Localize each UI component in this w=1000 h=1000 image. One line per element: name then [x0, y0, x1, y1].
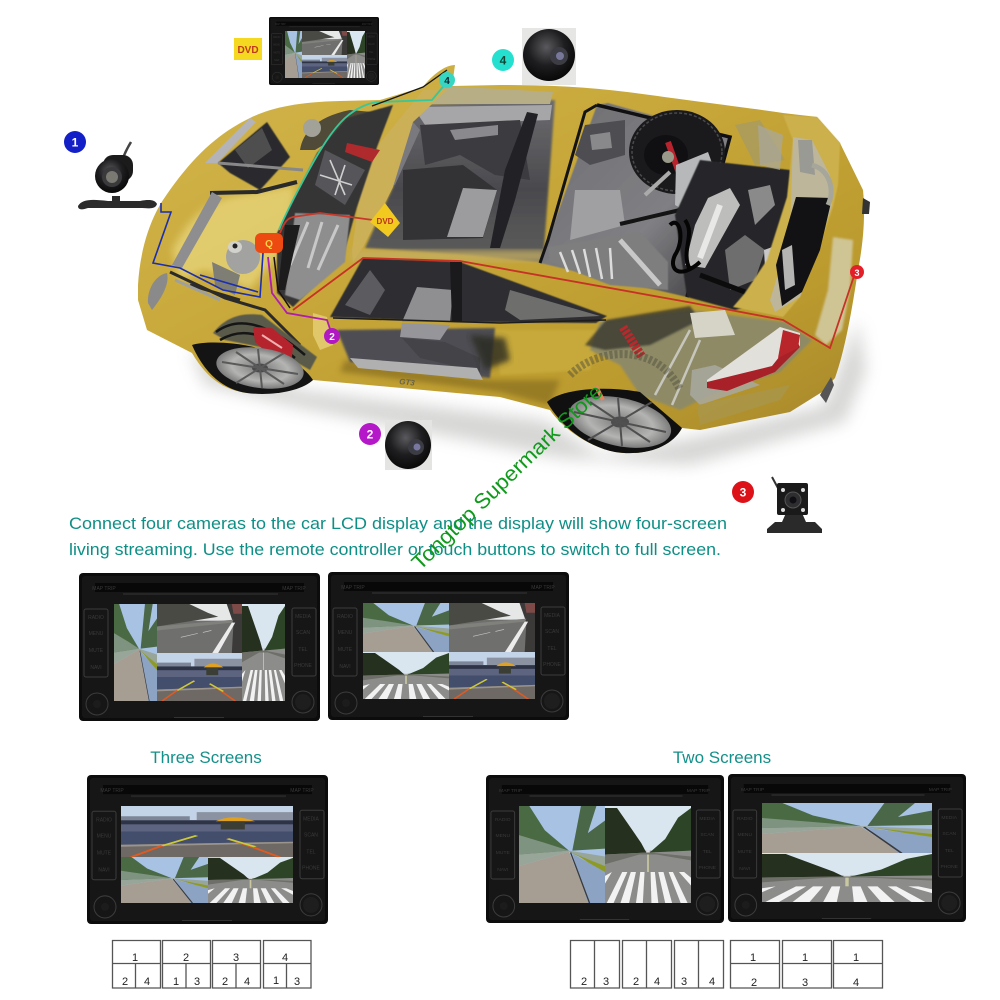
number badge 4: 4 — [500, 54, 507, 68]
rear mechanicals — [570, 306, 834, 425]
layout 2 beside 3 — [570, 940, 620, 988]
layout 3 over 2 4: 3 — [233, 952, 239, 964]
marker: 3 on car — [850, 265, 864, 279]
layout diagrams: two screens — [570, 940, 882, 989]
layout diagrams: three screens — [112, 940, 311, 988]
icon: DVD yellow label: DVD — [237, 45, 259, 56]
callout: camera 2 — [359, 420, 432, 470]
dash and door pocket strip — [413, 105, 552, 125]
marker: 4 on car: 4 — [444, 76, 450, 87]
layout 1 over 2: 1 — [750, 952, 756, 964]
layout 4 over 1 3: 3 — [294, 976, 300, 988]
heading: Three Screens: Three Screens — [150, 748, 262, 767]
car body — [138, 65, 864, 453]
steering and front pipes — [170, 272, 300, 345]
layout 1 over 3 — [782, 940, 832, 989]
layout 1 over 3: 1 — [802, 952, 808, 964]
wire: red camera 3 — [293, 258, 855, 348]
rear wheel — [547, 386, 682, 456]
icon: dome camera — [385, 420, 432, 470]
brake booster — [226, 240, 260, 274]
layout 2 beside 4: 4 — [654, 976, 660, 988]
layout 3 beside 4 — [674, 940, 724, 988]
small head unit with four-way screen — [269, 17, 379, 85]
head unit: four screens variant 2 — [328, 572, 569, 720]
top front tyre stripes — [300, 110, 372, 150]
top DVD label and display — [234, 17, 379, 85]
layout 1 over 2: 2 — [751, 977, 757, 989]
layout 1 over 2 4: 1 — [132, 952, 138, 964]
head unit: two screens horizontal split — [728, 774, 966, 922]
description text — [69, 515, 727, 559]
marker: DVD diamond — [370, 203, 400, 237]
ground shadow — [190, 320, 866, 465]
callout: camera 1 — [64, 131, 157, 209]
layout 1 over 2 4: 2 — [122, 976, 128, 988]
layout 1 over 3: 3 — [802, 977, 808, 989]
rear fender bright panel — [495, 330, 600, 375]
layout 1 over 4: 1 — [853, 952, 859, 964]
layout 1 over 2 — [730, 940, 780, 989]
layout 1 over 4 — [834, 940, 882, 989]
wire: purple camera 2 — [268, 257, 332, 335]
number badge 3: 3 — [740, 486, 747, 500]
layout 1 over 4: 4 — [853, 977, 859, 989]
icon: dome camera — [522, 28, 576, 85]
engine bay — [670, 120, 793, 310]
layout 1 over 2 4: 4 — [144, 976, 150, 988]
icon: DVD yellow label — [234, 38, 262, 60]
gold A-pillar — [352, 90, 447, 262]
icon: bracket camera — [78, 142, 157, 209]
rear window interior — [540, 103, 730, 297]
icon: square LED camera — [767, 477, 822, 533]
wire: green camera 4 — [279, 82, 447, 230]
watermark: Tongtop Supermark Store — [407, 380, 608, 575]
callout: camera 4 — [492, 28, 576, 85]
front door mirror — [313, 313, 333, 350]
description text: Connect four cameras to the car LCD display and the display will show four-screen — [69, 515, 727, 533]
wire: black beside purple — [274, 257, 290, 308]
wire: blue camera 1 — [153, 203, 263, 297]
layout 2 beside 4 — [622, 940, 672, 988]
layout 3 beside 4: 3 — [681, 976, 687, 988]
layout 2 over 1 3: 3 — [194, 976, 200, 988]
front wheel — [192, 342, 313, 394]
marker: 3 on car: 3 — [854, 268, 860, 278]
marker: Q orange display unit — [255, 233, 283, 253]
spoiler arch and radiator — [733, 115, 840, 317]
layout 2 beside 3: 3 — [603, 976, 609, 988]
rear suspension tyre — [620, 110, 725, 224]
head unit: two screens vertical split — [486, 775, 724, 923]
layout 3 beside 4: 4 — [709, 976, 715, 988]
wire: black camera 4 — [372, 70, 447, 106]
layout 2 beside 3: 2 — [581, 976, 587, 988]
front bay — [277, 105, 393, 307]
front cabin upper interior — [350, 86, 555, 262]
marker: 2 on car — [324, 328, 340, 344]
number badge 1: 1 — [72, 136, 79, 150]
layout 4 over 1 3: 1 — [273, 975, 279, 987]
front compartment parts — [148, 105, 393, 345]
head unit: three screens — [87, 775, 328, 924]
headlight — [148, 273, 168, 310]
layout 3 over 2 4: 2 — [222, 976, 228, 988]
layout 3 over 2 4 — [212, 940, 260, 988]
rear exhaust cans — [815, 198, 870, 345]
hood highlight — [172, 185, 295, 290]
layout 2 over 1 3 — [162, 940, 210, 988]
heading: Two Screens: Two Screens — [673, 748, 771, 767]
layout 3 over 2 4: 4 — [244, 976, 250, 988]
text: GT3 badge: GT3 — [399, 377, 416, 388]
layout 1 over 2 4 — [112, 940, 160, 988]
side window interior — [330, 258, 607, 323]
layout 4 over 1 3 — [264, 940, 311, 988]
number badge 2: 2 — [367, 428, 374, 442]
marker: Q orange display unit: Q — [265, 239, 273, 250]
lower door seat interior — [337, 323, 510, 380]
description text: living streaming. Use the remote controller or touch buttons to switch to full screen. — [69, 541, 721, 559]
head unit: four screens variant 1 — [79, 573, 320, 721]
side sill shading — [340, 360, 560, 405]
layout 2 beside 4: 2 — [633, 976, 639, 988]
car cutaway illustration — [138, 65, 870, 465]
callout: camera 3 — [732, 477, 822, 533]
layout 2 over 1 3: 1 — [173, 976, 179, 988]
layout 2 over 1 3: 2 — [183, 952, 189, 964]
transmission — [548, 232, 668, 290]
wire: red to DVD — [280, 213, 373, 233]
layout 4 over 1 3: 4 — [282, 952, 288, 964]
marker: DVD diamond: DVD — [377, 217, 394, 226]
marker: 4 on car — [439, 72, 455, 88]
front brake and tyre cutaway — [213, 314, 317, 370]
marker: 2 on car: 2 — [329, 332, 335, 343]
